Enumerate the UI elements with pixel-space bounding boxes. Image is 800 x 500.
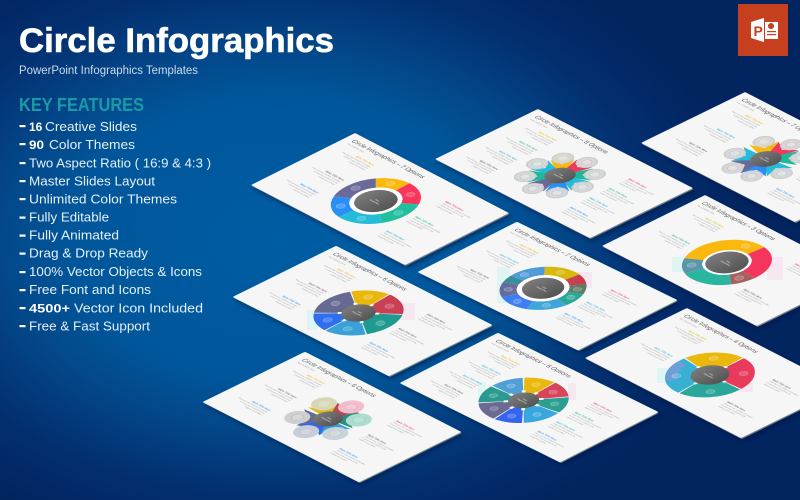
left item: There are many variations of passages [691,214,722,230]
left item: There are many variations of passages [484,147,515,162]
right item: Main Title Here [573,411,596,422]
right item: majority have suffered [584,406,603,416]
left item: There are many variations of passages [237,397,268,413]
right item: of Lorem Ipsum available but the [720,404,747,418]
left item: There are many variations of passages [311,167,342,183]
right item: of Lorem Ipsum available but the [601,191,629,204]
left item: of Lorem Ipsum available but the [265,388,292,402]
right item: There are many variations of passages [552,423,584,438]
left item: majority have suffered [329,273,348,283]
right item: Main Title Here [414,216,435,227]
left item: There are many variations of passages [455,265,487,281]
slide subtitle: Your Subtitle Here [345,142,367,153]
donut chart: Main [725,261,731,264]
right item: There are many variations of passages [394,329,425,345]
slide title: Circle Infographics – 7 Options [349,139,427,179]
right item: There are many variations of passages [768,380,799,396]
left item: Main Title Here [537,131,559,142]
left item: majority have suffered [512,249,531,259]
right item: Main Title Here [385,230,407,241]
left item: majority have suffered [737,120,755,129]
right item: of Lorem Ipsum available but the [420,317,447,330]
left item: majority have suffered [680,335,699,345]
right item: of Lorem Ipsum available but the [332,451,360,465]
right item: There are many variations of passages [411,217,442,234]
slide subtitle: Your Subtitle Here [528,118,550,129]
left item: There are many variations of passages [322,264,354,280]
right item: majority have suffered [329,452,348,462]
right item: Main Title Here [536,430,559,441]
feature list: Vector Icon Included [74,300,203,316]
panel: slide 6 mid left, six option pie [231,246,497,380]
left item: majority have suffered [493,360,512,370]
slide sheet [602,195,800,326]
left item: majority have suffered [492,259,511,269]
pie chart [307,287,409,339]
left item: of Lorem Ipsum available but the [287,183,314,197]
right item: of Lorem Ipsum available but the [579,304,607,318]
pie chart: Infographics [516,398,528,404]
left item: Main Title Here [469,268,491,279]
right item: majority have suffered [618,182,637,192]
left item: of Lorem Ipsum available but the [506,141,533,154]
feature list: Master Slides Layout [29,174,155,188]
left item: of Lorem Ipsum available but the [295,282,323,296]
feature list: 4500+ [29,302,70,316]
left item: Main Title Here [715,128,737,139]
left item: Main Title Here [497,150,519,161]
right item: Main Title Here [742,288,764,300]
left item: There are many variations of passages [291,370,323,386]
pie chart: Main [708,373,714,376]
left item: majority have suffered [347,161,366,171]
right item: of Lorem Ipsum available but the [531,433,558,447]
pie chart: Main [356,311,363,314]
panel: slide 4 right, three option donut [600,195,800,330]
right item: of Lorem Ipsum available but the [603,292,632,306]
right item: majority have suffered [717,405,736,415]
left item: There are many variations of passages [467,361,499,377]
left item: majority have suffered [317,176,336,186]
petal diagram [269,389,388,449]
right item: majority have suffered [762,383,781,393]
feature list: Free & Fast Support [29,318,150,334]
right item: majority have suffered [547,425,566,435]
subtitle: PowerPoint Infographics Templates [19,65,198,77]
slide subtitle: Your Subtitle Here [735,101,757,112]
right item: majority have suffered [577,306,596,315]
left item: Main Title Here [498,253,521,264]
right item: of Lorem Ipsum available but the [362,345,390,359]
right item: majority have suffered [359,346,378,356]
slide title: Circle Infographics – 8 Options [532,115,610,155]
left item: of Lorem Ipsum available but the [488,355,515,368]
right item: There are many variations of passages [585,199,616,214]
donut chart [321,173,430,229]
left item: Main Title Here [499,355,522,366]
left item: majority have suffered [471,165,490,175]
right item: majority have suffered [601,294,620,303]
slide subtitle: Your Subtitle Here [508,231,530,242]
icon: PowerPoint logo [738,4,788,56]
left item: of Lorem Ipsum available but the [487,254,515,267]
right item: majority have suffered [560,211,579,220]
left item: of Lorem Ipsum available but the [293,374,321,388]
donut chart: Infographics [368,199,380,205]
feature list: Creative Slides [45,119,138,134]
left item: of Lorem Ipsum available but the [239,401,266,415]
panel: slide 2 top middle, eight petals [433,109,698,242]
right item: majority have suffered [388,332,407,342]
left item: There are many variations of passages [505,240,537,256]
petal diagram: Main [764,157,770,160]
left item: There are many variations of passages [263,384,294,400]
feature list: Drag & Drop Ready [29,246,149,260]
left item: Main Title Here [478,160,500,171]
right item: of Lorem Ipsum available but the [621,181,648,195]
petal diagram: Infographics [320,417,331,423]
right item: of Lorem Ipsum available but the [379,233,406,247]
left item: of Lorem Ipsum available but the [324,268,351,282]
feature list: Fully Animated [29,228,119,242]
left item: of Lorem Ipsum available but the [312,170,340,185]
right item: of Lorem Ipsum available but the [438,204,465,218]
left item: There are many variations of passages [448,371,480,386]
right item: Main Title Here [366,434,388,445]
right item: of Lorem Ipsum available but the [568,415,595,428]
right item: of Lorem Ipsum available but the [582,200,609,214]
left item: Main Title Here [281,295,303,306]
slide sheet [400,333,658,462]
panel: slide 7 bottom left, six petals [201,352,466,486]
left item: majority have suffered [455,380,474,389]
right item: There are many variations of passages [565,208,597,224]
right item: majority have suffered [579,201,598,211]
left item: Main Title Here [687,330,709,341]
right item: majority have suffered [417,318,436,328]
donut chart: Infographics [535,287,547,292]
feature list: 16 [29,120,43,134]
left item: majority have suffered [646,352,665,362]
right item: of Lorem Ipsum available but the [557,315,585,329]
panel: slide 1 left, seven option donut [249,133,514,269]
left item: Main Title Here [299,183,320,194]
left item: Main Title Here [518,243,541,254]
right item: Main Title Here [397,327,419,338]
right item: Main Title Here [607,187,629,198]
left item: There are many variations of passages [657,230,688,246]
slide sheet [641,92,800,222]
right item: majority have suffered [376,235,395,245]
left item: There are many variations of passages [730,111,761,126]
left item: majority have suffered [292,189,311,198]
donut chart: Main [541,287,547,290]
left item: majority have suffered [437,389,456,399]
right item: There are many variations of passages [422,315,454,331]
left item: Main Title Here [354,155,376,166]
left item: of Lorem Ipsum available but the [466,160,494,174]
left item: of Lorem Ipsum available but the [676,142,703,156]
feature list: Free Font and Icons [29,282,152,297]
slide title: Circle Infographics – 4 Options [681,314,760,354]
left item: There are many variations of passages [524,127,555,143]
right item: majority have suffered [435,205,454,215]
left item: of Lorem Ipsum available but the [525,131,553,145]
left item: majority have suffered [511,146,530,155]
panel: slide 8 bottom middle, eight option pie [398,333,663,466]
left item: Main Title Here [670,234,692,245]
pie chart: Main [521,399,528,402]
right item: There are many variations of passages [723,403,754,419]
feature list: Fully Editable [29,210,109,224]
left item: There are many variations of passages [639,343,671,359]
right item: Main Title Here [592,402,614,413]
pie chart [473,375,575,426]
petal diagram: Infographics [552,174,563,179]
left item: There are many variations of passages [429,380,461,396]
left item: majority have suffered [244,406,263,416]
slide sheet [251,133,509,265]
right item: Main Title Here [394,420,416,431]
left item: Main Title Here [480,364,503,375]
right item: of Lorem Ipsum available but the [391,331,418,345]
left item: There are many variations of passages [285,179,316,195]
left item: There are many variations of passages [341,152,372,168]
left item: of Lorem Ipsum available but the [641,347,669,361]
feature list: 90 [29,138,44,152]
feature list: Color Themes [49,137,136,152]
left item: Main Title Here [653,346,675,358]
right item: There are many variations of passages [441,202,472,219]
slide title: Circle Infographics – 8 Options [493,339,573,379]
petal diagram: Main [558,174,564,177]
right item: of Lorem Ipsum available but the [360,437,388,451]
left item: of Lorem Ipsum available but the [703,128,731,142]
left item: majority have suffered [462,274,482,284]
right item: of Lorem Ipsum available but the [765,382,793,396]
pie chart: Infographics [702,373,713,379]
left item: majority have suffered [474,370,493,379]
slide subtitle: Your Subtitle Here [489,342,511,353]
right item: There are many variations of passages [604,189,636,205]
right item: Main Title Here [585,301,607,312]
left item: Main Title Here [305,374,327,385]
left item: There are many variations of passages [267,292,299,307]
petal diagram: Infographics [758,157,770,163]
slide sheet [233,246,492,376]
left item: There are many variations of passages [702,124,733,140]
left item: Main Title Here [517,140,539,151]
pie chart: Infographics [351,311,363,317]
panel: slide 3 top right, seven petals [639,92,800,226]
slide title: Circle Infographics – 6 Options [330,252,409,292]
left item: majority have suffered [663,240,682,249]
right item: of Lorem Ipsum available but the [389,423,416,437]
left item: majority have suffered [697,223,716,233]
left item: There are many variations of passages [486,351,518,367]
left item: majority have suffered [274,301,293,310]
pie chart [655,348,765,402]
right item: There are many variations of passages [560,314,592,330]
slide title: Circle Infographics – 3 Options [699,201,777,241]
left item: Main Title Here [336,268,358,279]
left item: majority have suffered [298,379,317,389]
petal diagram [494,143,625,208]
left item: Main Title Here [307,282,329,293]
left item: majority have suffered [491,156,510,165]
right item: Main Title Here [425,313,447,324]
donut chart: Main [374,199,380,203]
right item: majority have suffered [555,317,574,326]
left item: of Lorem Ipsum available but the [342,155,370,170]
slide sheet [418,222,677,350]
right item: majority have suffered [386,424,405,434]
feature list: Unlimited Color Themes [29,192,178,206]
right item: Main Title Here [588,197,610,208]
left item: of Lorem Ipsum available but the [469,365,496,378]
right item: majority have suffered [358,438,377,448]
right item: Main Title Here [609,289,631,300]
donut chart [678,236,782,289]
left item: Main Title Here [277,388,299,399]
left item: majority have suffered [680,147,699,157]
left item: of Lorem Ipsum available but the [675,330,703,344]
slide sheet [203,352,461,482]
right item: majority have suffered [733,293,752,303]
left item: There are many variations of passages [294,279,325,294]
right item: Main Title Here [563,312,585,323]
right item: majority have suffered [766,192,785,202]
right item: There are many variations of passages [589,404,621,419]
left item: of Lorem Ipsum available but the [507,244,535,257]
feature list: 100% Vector Objects & Icons [29,264,203,279]
left item: majority have suffered [270,393,289,403]
slide subtitle: Your Subtitle Here [678,317,699,328]
left item: There are many variations of passages [674,138,705,154]
right item: of Lorem Ipsum available but the [549,424,576,437]
right item: There are many variations of passages [335,449,366,465]
left item: There are many variations of passages [485,250,517,266]
right item: majority have suffered [528,435,547,444]
petal diagram: Main [326,417,332,420]
left item: of Lorem Ipsum available but the [659,234,686,248]
left item: of Lorem Ipsum available but the [457,269,485,283]
feature list: Two Aspect Ratio ( 16:9 & 4:3 ) [29,156,211,170]
right item: Main Title Here [555,421,577,432]
right item: Main Title Here [771,378,793,390]
right item: of Lorem Ipsum available but the [563,209,590,223]
petal diagram [703,127,800,191]
right item: Main Title Here [725,401,747,412]
slide subtitle: Your Subtitle Here [695,204,717,215]
left item: Main Title Here [324,170,346,181]
right item: majority have suffered [405,220,424,230]
left item: majority have suffered [300,288,319,297]
icon: PowerPoint logo: P [754,23,763,39]
left item: Main Title Here [250,400,272,412]
right item: There are many variations of passages [363,435,395,452]
left item: majority have suffered [530,136,549,146]
left item: of Lorem Ipsum available but the [450,374,477,388]
title: Circle Infographics [19,22,334,60]
right item: of Lorem Ipsum available but the [769,191,796,205]
left item: Main Title Here [461,374,484,385]
feature list [20,119,211,334]
donut chart: Infographics [719,260,731,266]
slide title: Circle Infographics – 6 Options [299,358,378,398]
left item: Main Title Here [687,142,709,153]
left item: of Lorem Ipsum available but the [486,150,513,164]
right item: There are many variations of passages [570,413,602,429]
left item: There are many variations of passages [673,326,705,342]
panel: slide 5 center, seven option donut [416,222,682,354]
slide sheet [435,109,693,238]
right item: majority have suffered [599,192,618,202]
left item: There are many variations of passages [465,156,496,172]
left item: of Lorem Ipsum available but the [692,217,720,232]
right item: Main Title Here [338,448,360,459]
slide subtitle: Your Subtitle Here [296,361,317,372]
left item: of Lorem Ipsum available but the [732,114,759,128]
left item: There are many variations of passages [504,137,535,153]
right item: Main Title Here [627,178,649,189]
right item: Main Title Here [368,341,390,353]
left item: of Lorem Ipsum available but the [269,295,297,309]
slide title: Circle Infographics – 7 Options [512,228,592,267]
right item: Main Title Here [568,206,590,217]
donut chart [488,261,598,316]
left item: majority have suffered [708,134,727,143]
slide sheet [585,308,800,438]
right item: There are many variations of passages [533,432,565,448]
right item: There are many variations of passages [582,303,614,319]
right item: majority have suffered [565,416,584,426]
panel: slide 9 bottom right, four option pie [583,308,800,442]
right item: Main Title Here [775,187,796,199]
right item: There are many variations of passages [624,180,655,196]
left item: Main Title Here [443,384,465,395]
right item: There are many variations of passages [739,290,770,306]
left item: Main Title Here [704,217,726,228]
heading: key features: KEY FEATURES [19,95,144,115]
right item: of Lorem Ipsum available but the [408,219,435,233]
slide subtitle: Your Subtitle Here [327,255,348,266]
left item: Main Title Here [744,114,765,125]
left item: of Lorem Ipsum available but the [431,384,459,397]
right item: There are many variations of passages [606,291,638,306]
right item: There are many variations of passages [392,422,423,438]
right item: of Lorem Ipsum available but the [586,405,613,419]
right item: Main Title Here [444,201,465,212]
right item: There are many variations of passages [365,343,396,359]
right item: of Lorem Ipsum available but the [736,292,764,306]
right item: There are many variations of passages [382,232,413,248]
